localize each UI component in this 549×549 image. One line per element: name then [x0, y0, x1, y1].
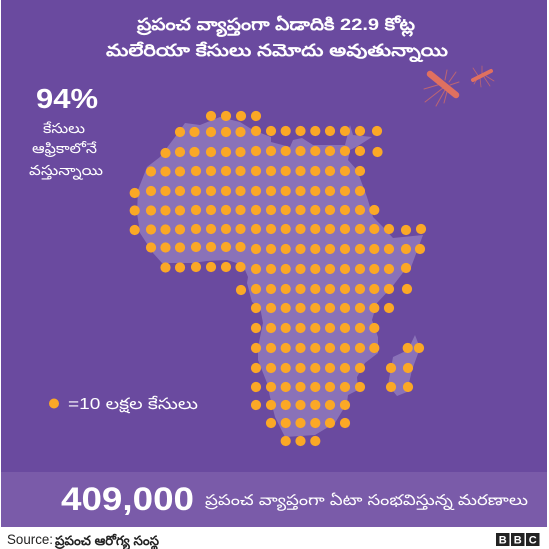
callout: 94% of cases: [29, 83, 103, 180]
source line: [7, 531, 159, 549]
dot grid: one million cases each: [135, 116, 421, 441]
callout: 94% of cases: కేసులు: [43, 120, 85, 136]
title: [106, 15, 448, 63]
legend: label: =10 లక్షల కేసులు: [68, 395, 198, 414]
map: Africa silhouette: [137, 117, 423, 437]
legend: [49, 395, 198, 414]
source line: ప్రపంచ ఆరోగ్య సంస్థ: [54, 533, 159, 549]
legend: dot swatch: [49, 398, 59, 408]
stat: 409,000 deaths: [61, 481, 528, 517]
map: Madagascar: [388, 335, 420, 396]
stat: 409,000 deaths: ప్రపంచ వ్యాప్తంగా ఏటా సంభవిస్తున్న మరణాలు: [205, 492, 528, 511]
callout: 94% of cases: ఆఫ్రికాలోనే: [32, 140, 97, 157]
title: మలేరియా కేసులు నమోదు అవుతున్నాయి: [106, 41, 448, 63]
panel: deaths band: [1, 472, 547, 527]
logo: BBC: B: [514, 534, 522, 546]
stat: 409,000 deaths: 409,000: [61, 481, 194, 517]
source line: Source:: [7, 531, 53, 547]
callout: 94% of cases: వస్తున్నాయి: [29, 162, 103, 180]
logo: BBC: B: [499, 534, 507, 546]
logo: BBC: C: [529, 534, 537, 546]
icon: mosquitoes: [424, 66, 494, 106]
title: ప్రపంచ వ్యాప్తంగా ఏడాదికి 22.9 కోట్ల: [136, 15, 415, 37]
logo: BBC: [496, 533, 540, 546]
callout: 94% of cases: 94%: [36, 83, 98, 114]
